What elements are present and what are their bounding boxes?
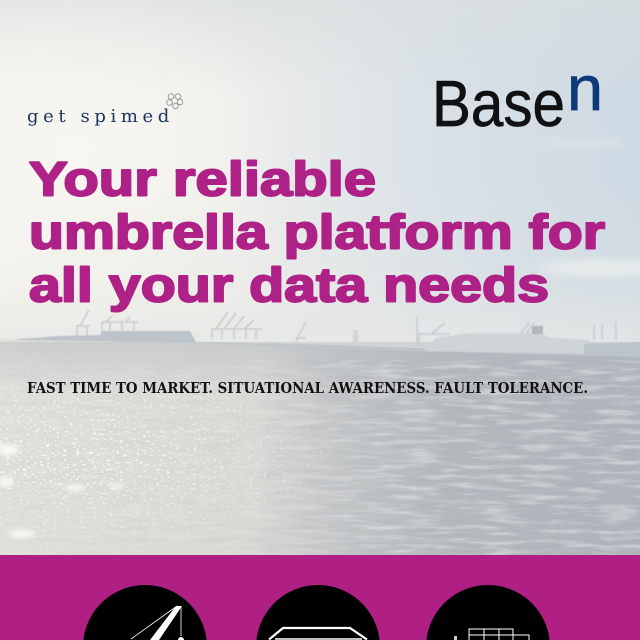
Base wordmark: Base [432,67,565,140]
background: distant port skyline [18,310,640,357]
icon: crane [83,585,207,640]
icon: container stack [426,585,550,640]
headline: all your data needs [29,260,549,312]
icon: ship [256,585,380,640]
background: sea water [0,339,640,556]
superscript n: n [567,54,603,124]
panel: magenta footer band [0,555,640,640]
logo: get spimed [27,94,183,127]
tagline: FAST TIME TO MARKET. SITUATIONAL AWARENESS. FAULT TOLERANCE. [27,380,588,397]
logo: Basen [432,54,603,140]
headline [29,154,605,312]
headline: Your reliable [29,154,376,206]
headline: umbrella platform for [29,206,605,260]
icon: flower outline [167,94,183,109]
background: hazy sky [0,0,640,360]
get spimed wordmark: get spimed [27,106,174,127]
